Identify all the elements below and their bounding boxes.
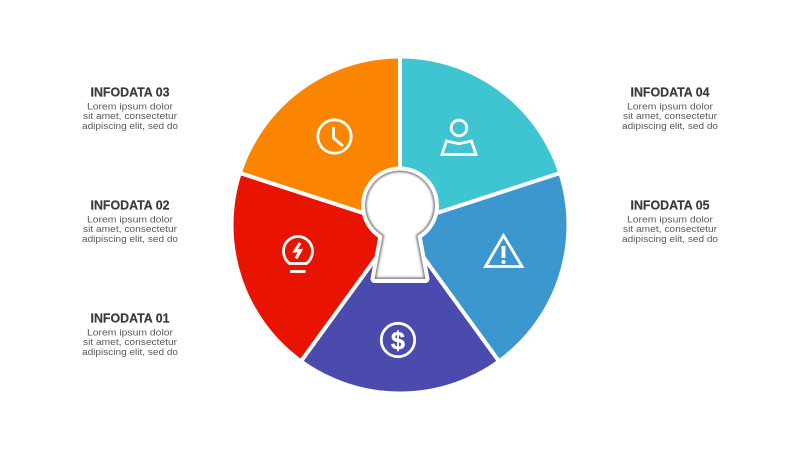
- segment: infodata 02: [234, 174, 400, 360]
- text: infodata 05: [622, 198, 718, 245]
- text: infodata 01: sit amet, consectetur: [83, 337, 178, 348]
- text: infodata 01: [82, 310, 178, 358]
- text: infodata 05: adipiscing elit, sed do: [622, 234, 718, 245]
- icon: light bulb: [284, 236, 312, 272]
- segment: infodata 04: [400, 58, 558, 225]
- text: infodata 03: INFODATA 03: [90, 84, 170, 100]
- text: infodata 05: Lorem ipsum dolor: [627, 214, 714, 226]
- text: infodata 02: sit amet, consectetur: [83, 224, 178, 235]
- text: infodata 01: INFODATA 01: [90, 310, 170, 326]
- text: infodata 01: Lorem ipsum dolor: [87, 328, 174, 338]
- text: infodata 04: sit amet, consectetur: [623, 111, 718, 122]
- text: infodata 04: [622, 84, 718, 132]
- text: infodata 02: [82, 198, 178, 245]
- text: infodata 05: sit amet, consectetur: [623, 224, 718, 235]
- text: infodata 02: adipiscing elit, sed do: [82, 234, 178, 245]
- segment: infodata 05: [400, 174, 566, 360]
- text: infodata 01: adipiscing elit, sed do: [82, 347, 178, 358]
- text: infodata 03: adipiscing elit, sed do: [82, 121, 178, 132]
- keyhole: [365, 170, 435, 279]
- icon: person on map: [442, 120, 476, 154]
- text: infodata 05: INFODATA 05: [630, 198, 710, 212]
- segment: infodata 01 purple: [302, 225, 498, 392]
- icon: warning triangle: [486, 236, 522, 266]
- segment: infodata 03: [242, 58, 400, 225]
- icon: dollar coin: [381, 323, 415, 357]
- text: infodata 02: INFODATA 02: [90, 198, 170, 212]
- text: infodata 04: Lorem ipsum dolor: [627, 102, 714, 112]
- text: infodata 03: Lorem ipsum dolor: [87, 102, 174, 112]
- pie chart: [234, 54, 566, 392]
- text: infodata 04: INFODATA 04: [630, 84, 710, 100]
- text: infodata 03: sit amet, consectetur: [83, 111, 178, 122]
- text: infodata 02: Lorem ipsum dolor: [87, 214, 174, 226]
- text: infodata 04: adipiscing elit, sed do: [622, 121, 718, 132]
- text: infodata 03: [82, 84, 178, 132]
- icon: dollar coin: $: [391, 327, 405, 355]
- icon: clock: [318, 120, 351, 153]
